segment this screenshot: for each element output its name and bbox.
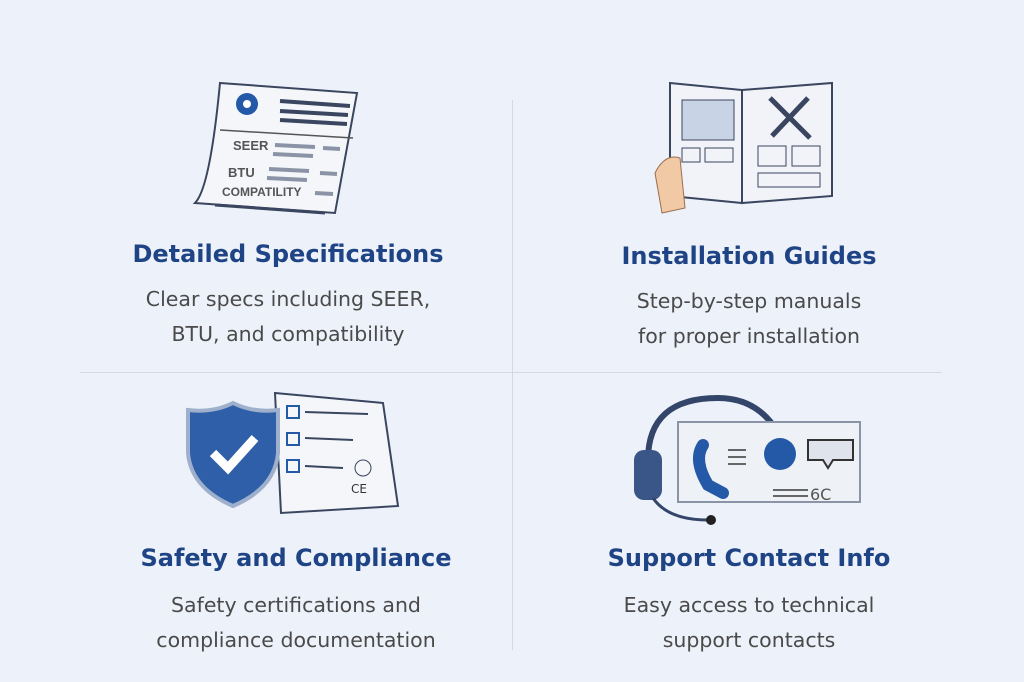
title: Support Contact Info: Support Contact Info [608, 544, 890, 572]
icon: manual [654, 82, 833, 214]
text: safety desc [156, 593, 436, 652]
icon: shield and checklist [186, 392, 400, 514]
text: support desc: support contacts [663, 628, 835, 652]
text: specs desc [146, 287, 430, 346]
text: install desc [637, 289, 861, 348]
title: Installation Guides: Installation Guides [622, 242, 876, 270]
text: install desc: Step-by-step manuals [637, 289, 861, 313]
text: safety desc: Safety certifications and [171, 593, 421, 617]
text: safety desc: compliance documentation [156, 628, 436, 652]
text: install desc: for proper installation [638, 324, 860, 348]
text: support desc [624, 593, 874, 652]
title: Safety and Compliance: Safety and Compliance [140, 544, 452, 572]
text: specs desc: BTU, and compatibility [171, 322, 405, 346]
text: specs desc: Clear specs including SEER, [146, 287, 430, 311]
icon: headset support card [634, 395, 861, 525]
icon: spec sheet [192, 82, 358, 214]
icon: spec sheet: SEER [233, 138, 269, 153]
icon: headset support card: 6C [810, 485, 831, 504]
icon: spec sheet: BTU [228, 165, 255, 180]
icon: shield and checklist: CE [351, 482, 367, 496]
text: support desc: Easy access to technical [624, 593, 874, 617]
icon: spec sheet: COMPATILITY [222, 185, 302, 199]
title: Detailed Specifications: Detailed Specifications [132, 240, 444, 268]
